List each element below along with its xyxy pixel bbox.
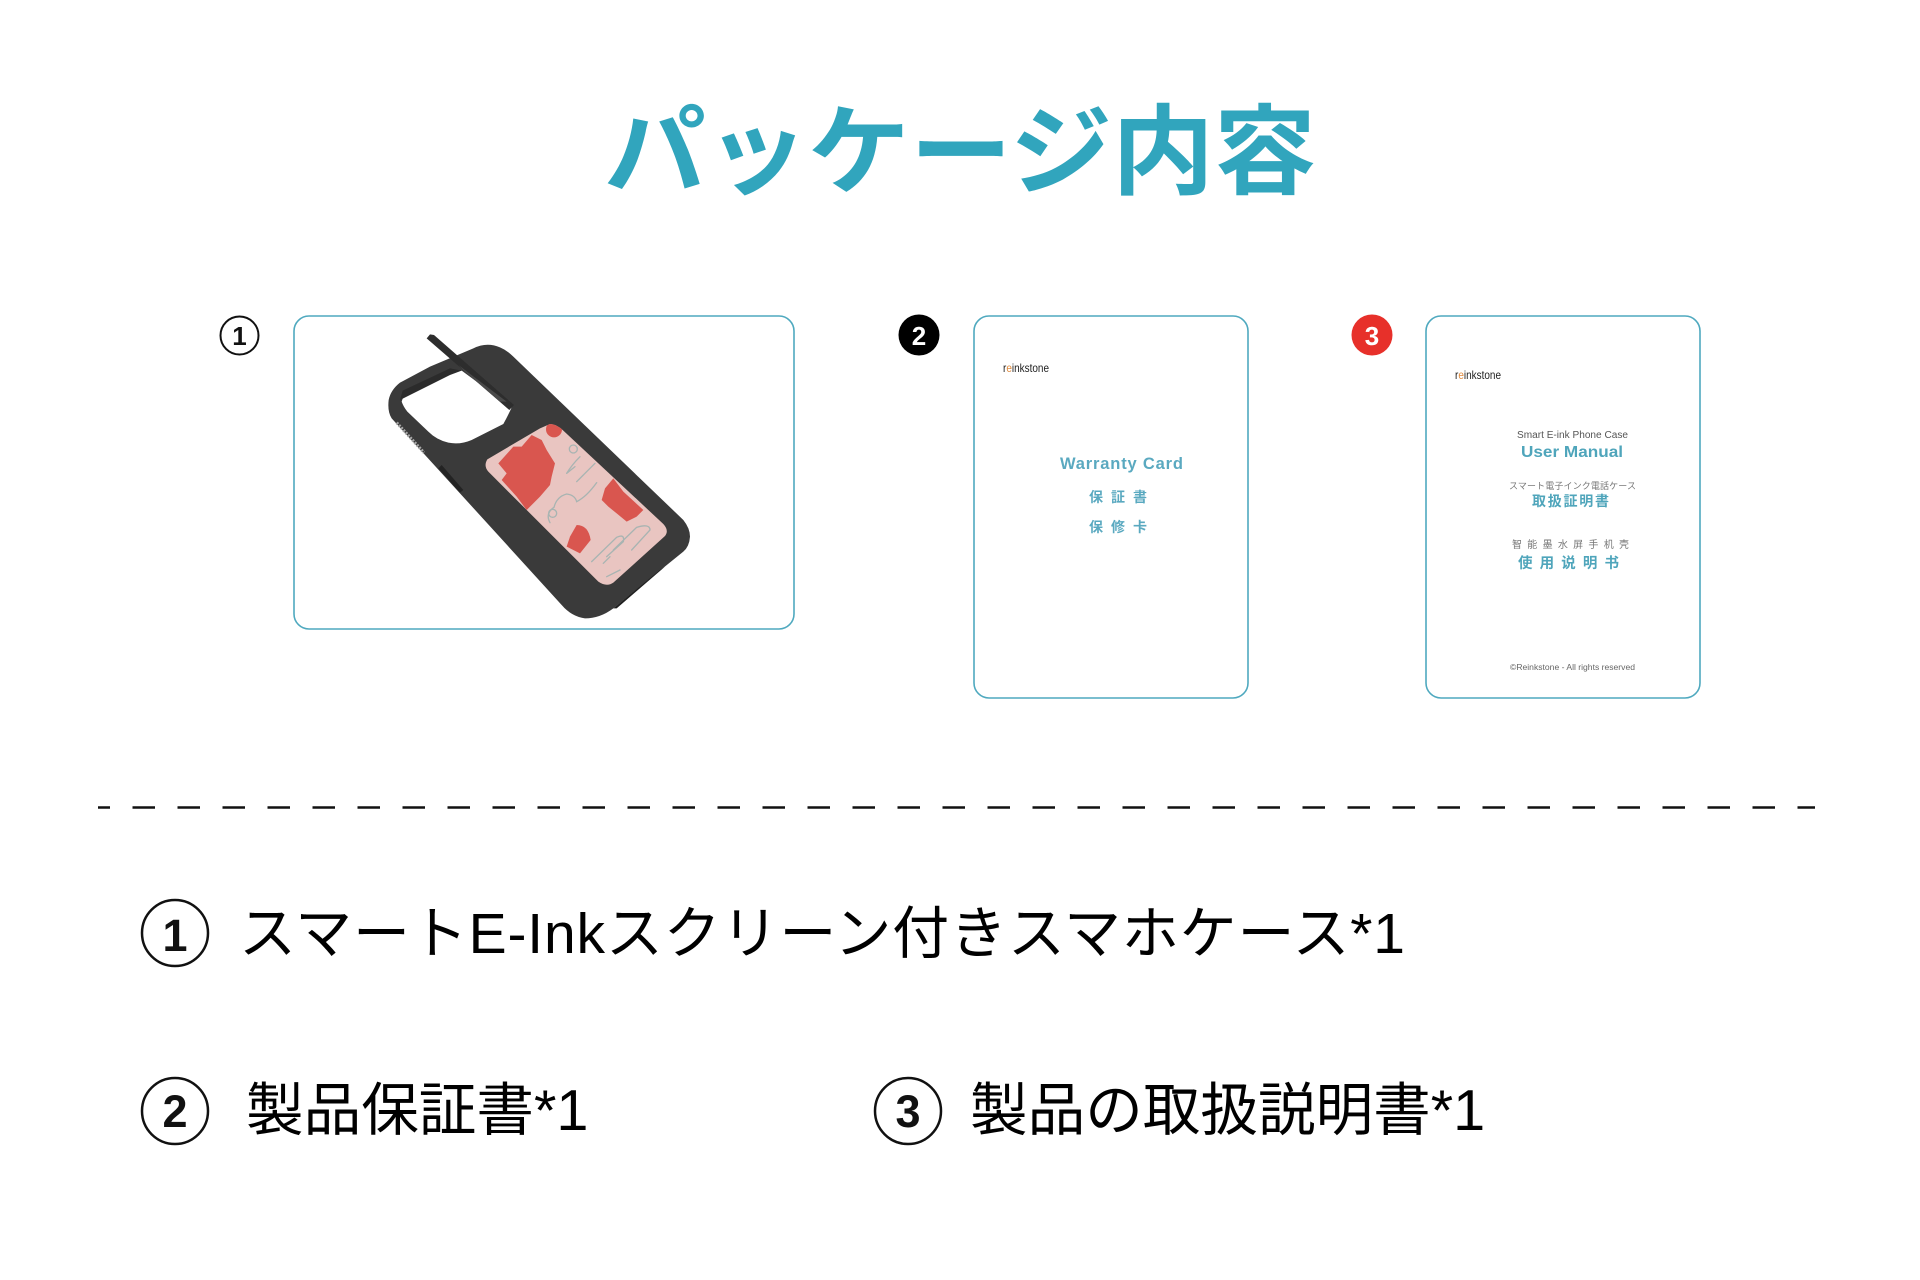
badge 3 — [1352, 314, 1392, 356]
list item 2: 製品保証書*1 — [246, 1079, 588, 1143]
e-ink screen — [486, 424, 667, 585]
illustration: phone case — [388, 334, 690, 618]
title: パッケージ内容 — [604, 73, 1316, 215]
manual en heading: User Manual — [1521, 444, 1623, 461]
logo: reinkstone — [1003, 361, 1049, 375]
warranty heading: Warranty Card — [1060, 455, 1183, 473]
list item 3: 製品の取扱説明書*1 — [970, 1079, 1485, 1143]
manual cn heading: 使用说明书 — [1518, 554, 1619, 572]
warranty jp: 保証書 — [1089, 489, 1147, 505]
badge 3: 3 — [1365, 321, 1379, 351]
manual jp subtitle: スマート電子インク電話ケース — [1509, 481, 1636, 491]
list item 3: 3 — [895, 1086, 921, 1137]
list item 1: 1 — [162, 910, 188, 961]
manual jp heading: 取扱証明書 — [1532, 493, 1609, 509]
badge 2: 2 — [912, 321, 926, 351]
badge 1: 1 — [232, 321, 247, 351]
manual en subtitle: Smart E-ink Phone Case — [1517, 430, 1628, 441]
manual cn subtitle: 智能墨水屏手机壳 — [1512, 538, 1629, 551]
list item 2: 2 — [162, 1086, 188, 1137]
badge 2 — [898, 314, 940, 356]
copyright: ©Reinkstone - All rights reserved — [1510, 662, 1635, 672]
list item 1: スマートE-Inkスクリーン付きスマホケース*1 — [239, 902, 1405, 966]
logo: reinkstone — [1455, 368, 1501, 382]
panel: warranty card — [974, 316, 1248, 698]
warranty cn: 保修卡 — [1089, 519, 1147, 535]
panel: phone case card — [294, 316, 794, 629]
panel: user manual card — [1426, 316, 1700, 698]
badge 1 — [220, 316, 258, 354]
